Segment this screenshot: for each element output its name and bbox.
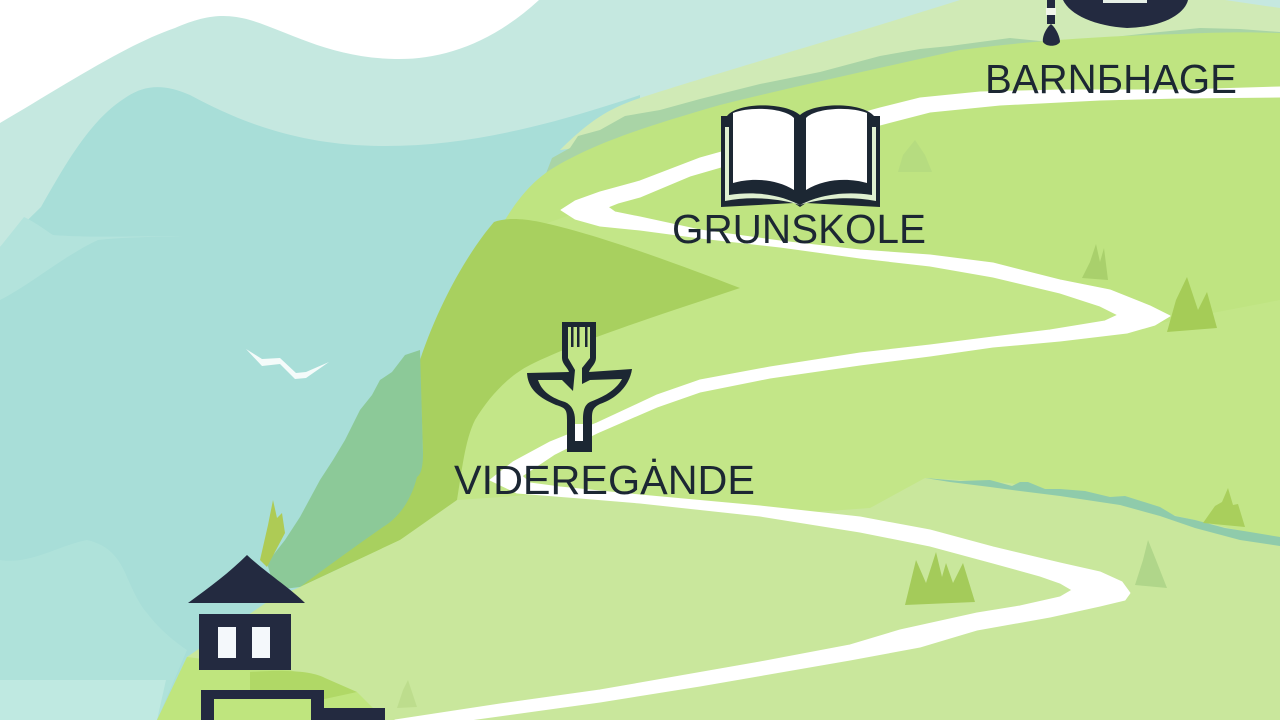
tree: faint behind book [898,140,932,172]
ridge tree line [545,28,1280,180]
lower floor [201,690,385,720]
main bright green hill [300,32,1280,720]
icon: house [188,555,385,720]
bottom left mist [0,680,166,720]
tree: by house [260,500,285,567]
label: Barnehage: BARNБHAGE [985,56,1237,102]
tree: right ridge [1203,488,1245,527]
foreground light green meadow [157,478,1280,720]
icon: fork and sprout [527,322,632,452]
label: Grunnskole: GRUNSKOLE [672,206,926,252]
seagulls [246,349,329,379]
dark green ridge [300,219,740,587]
tree: lower bend [1135,540,1167,588]
distant blue tree line [925,478,1280,546]
doorway [214,699,311,720]
far pale teal mountain [0,0,1280,300]
roof [188,555,305,603]
house hill shadow [250,671,357,700]
icon: graduation cap [1043,0,1188,46]
label: Videregående: VIDEREGȦNDE [454,457,755,503]
tree: group at road bend [1167,277,1217,332]
left mist band [0,217,184,300]
windows [218,627,236,658]
icon: open book [721,105,880,207]
lower left mist [0,540,187,720]
top right pale green hill [560,0,1280,150]
tree: faint near house [397,680,417,708]
top right blue corner [1225,0,1280,8]
forest green slope [267,350,423,590]
upper floor [199,614,291,670]
tree: lower group [905,552,975,605]
tree: small far right [1082,244,1108,280]
bright green foot of hill [157,657,385,720]
winding white road [395,87,1280,720]
mid green slope [440,215,1280,560]
teal water and near mountain [0,87,640,720]
